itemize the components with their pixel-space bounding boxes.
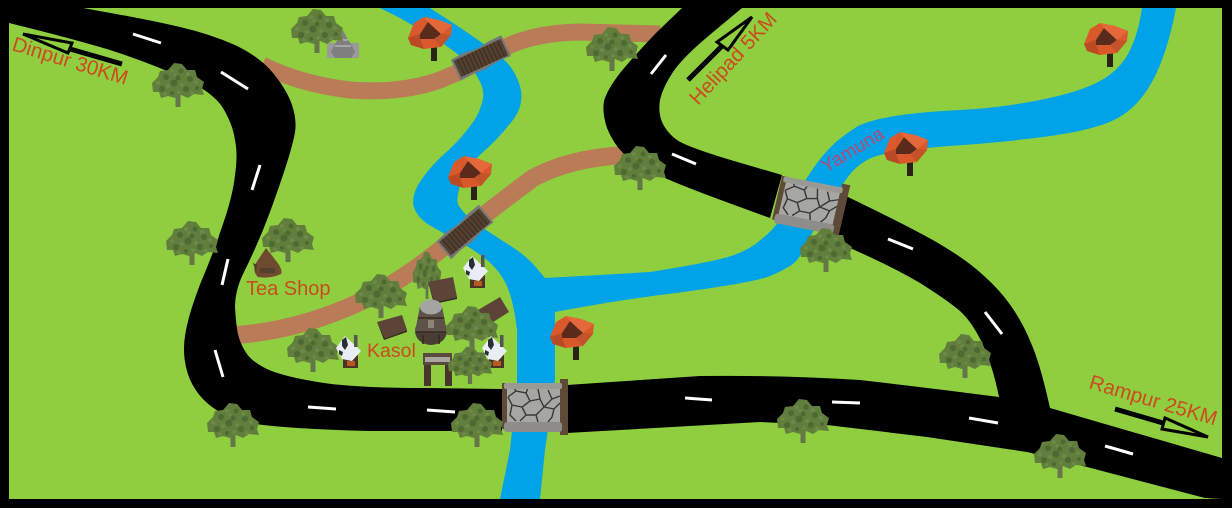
tree east upper — [446, 306, 498, 350]
label: Helipad 5KM: Helipad 5KM — [685, 8, 782, 109]
hut north — [428, 277, 457, 304]
road centre dashes — [133, 34, 1133, 454]
trees — [152, 9, 1086, 478]
river Yamuna — [380, 8, 1176, 499]
hut east — [478, 297, 509, 324]
dirt path south — [237, 155, 625, 335]
cottage north — [463, 255, 488, 288]
watch tower — [415, 300, 447, 345]
label: Dinpur 30KM: Dinpur 30KM — [10, 33, 131, 90]
village gate — [423, 353, 452, 386]
label: Rampur 25KM: Rampur 25KM — [1087, 371, 1220, 430]
label: Kasol: Kasol — [367, 340, 416, 362]
dirt path north — [262, 32, 660, 91]
stone bridge south — [502, 379, 568, 435]
label: Yamuna: Yamuna — [818, 123, 888, 177]
wooden bridge north — [451, 35, 511, 81]
arrow: Rampur — [1115, 409, 1208, 437]
cottage east — [482, 335, 507, 368]
road: east junction — [567, 192, 1222, 499]
arrow: Dinpur — [23, 34, 122, 64]
stupa — [327, 30, 359, 58]
arrow: Helipad — [688, 17, 752, 80]
road: to helipad — [603, 8, 782, 218]
wooden bridge south — [436, 205, 494, 259]
stone bridge east — [771, 172, 850, 238]
hut west — [377, 315, 407, 340]
tree east lower — [448, 347, 492, 384]
road: west — [9, 8, 502, 431]
red trees — [408, 17, 1128, 360]
label: Tea Shop: Tea Shop — [246, 278, 331, 300]
tea shop hut — [253, 248, 282, 278]
Kasol village buildings — [336, 255, 509, 386]
cottage west — [336, 335, 361, 368]
